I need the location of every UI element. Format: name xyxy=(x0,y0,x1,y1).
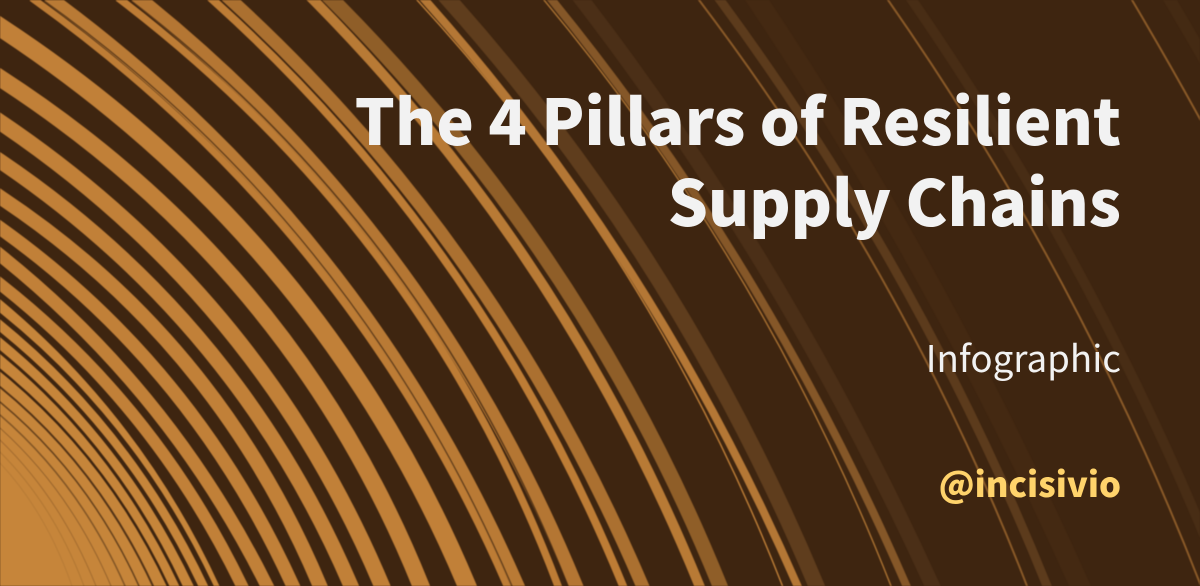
fading arch bands xyxy=(417,0,1200,586)
solid arch bands xyxy=(0,27,467,586)
title: Supply Chains xyxy=(668,154,1121,245)
handle: @incisivio xyxy=(939,457,1121,507)
title: The 4 Pillars of Resilient xyxy=(355,73,1121,164)
title xyxy=(355,73,1121,245)
inner solid area with narrow dark slits xyxy=(0,291,224,586)
split arch bands xyxy=(34,0,720,586)
subtitle: Infographic xyxy=(926,329,1121,383)
thin slits inside bands xyxy=(43,0,568,586)
